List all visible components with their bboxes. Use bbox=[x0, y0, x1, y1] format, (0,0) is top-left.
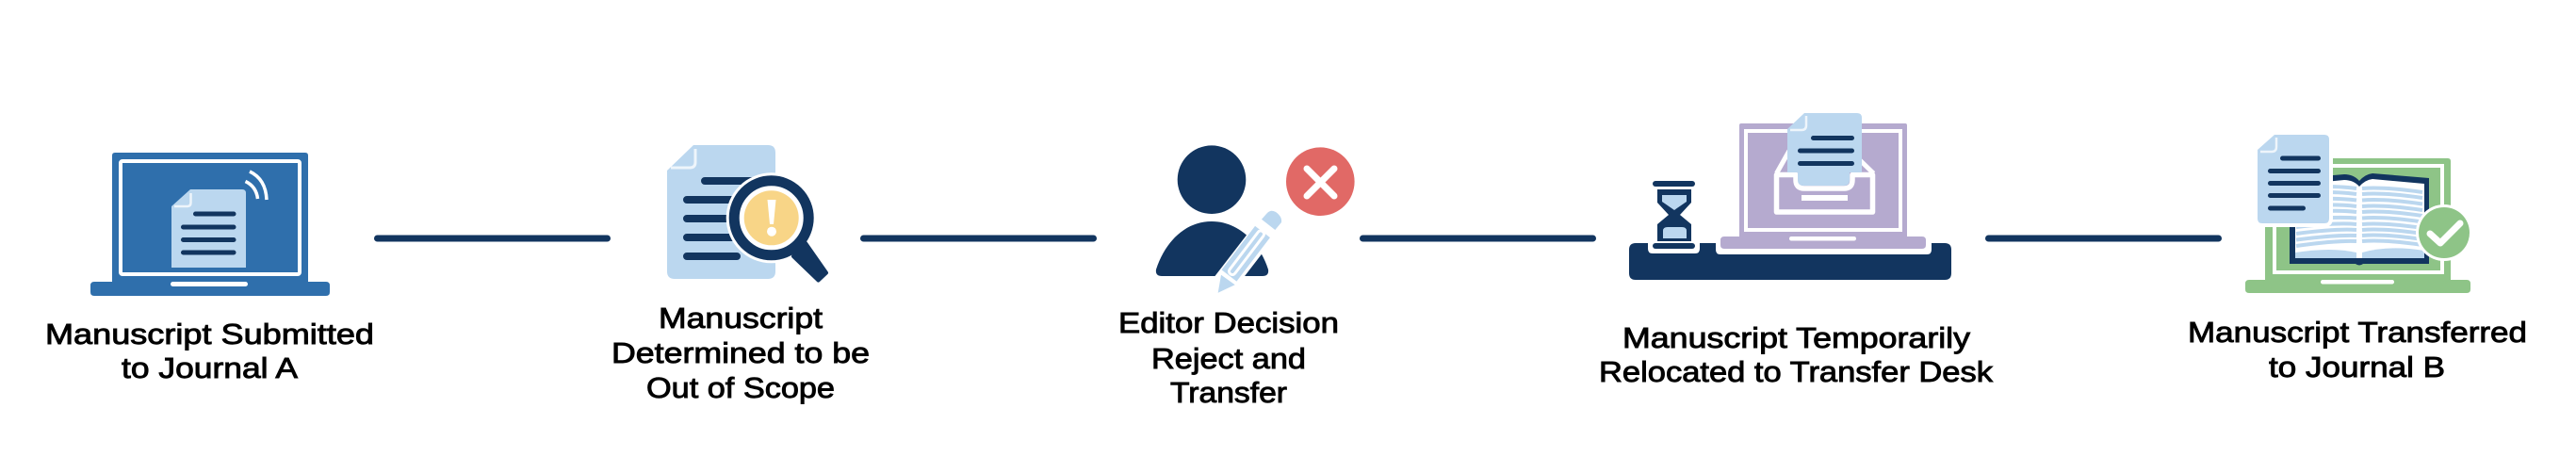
label: manuscript determined to be out of scope: Manuscript bbox=[659, 302, 823, 334]
step 2: out of scope bbox=[611, 145, 870, 404]
icon: document with magnifier and warning bbox=[667, 145, 826, 281]
icon: red rejection circle bbox=[1286, 147, 1355, 216]
label: manuscript transferred to journal B bbox=[2188, 316, 2527, 383]
label: manuscript determined to be out of scope: Out of Scope bbox=[646, 371, 835, 404]
label: manuscript submitted to journal A: Manuscript Submitted bbox=[45, 318, 374, 351]
label: manuscript submitted to journal A: to Journal A bbox=[122, 351, 298, 384]
label: manuscript submitted to journal A bbox=[45, 318, 374, 384]
label: manuscript temporarily relocated to transfer desk: Manuscript Temporarily bbox=[1622, 321, 1971, 354]
connector 3 bbox=[1362, 236, 1592, 241]
icon: laptop with document and signal bbox=[90, 153, 330, 296]
icon: editor with pencil bbox=[1156, 145, 1281, 293]
connector 2 bbox=[863, 236, 1093, 241]
icon: green check badge bbox=[2416, 204, 2472, 261]
step 5: transferred to journal B bbox=[2188, 135, 2527, 383]
icon: hourglass bbox=[1653, 181, 1695, 249]
label: editor decision reject and transfer: Reject and bbox=[1151, 342, 1306, 375]
label: manuscript transferred to journal B: Manuscript Transferred bbox=[2188, 316, 2527, 349]
icon: document bbox=[2258, 135, 2329, 223]
label: editor decision reject and transfer: Transfer bbox=[1170, 376, 1287, 409]
label: manuscript determined to be out of scope: Determined to be bbox=[611, 336, 870, 369]
icon: open book bbox=[2290, 173, 2429, 266]
icon: laptop with inbox tray and document bbox=[1720, 113, 1926, 249]
label: manuscript temporarily relocated to transfer desk bbox=[1599, 321, 1994, 388]
step 1: manuscript submitted bbox=[45, 153, 374, 384]
label: manuscript temporarily relocated to transfer desk: Relocated to Transfer Desk bbox=[1599, 355, 1994, 388]
connector 4 bbox=[1988, 236, 2218, 241]
label: manuscript determined to be out of scope bbox=[611, 302, 870, 404]
icon: transfer desk base bbox=[1629, 243, 1951, 280]
label: editor decision reject and transfer bbox=[1118, 306, 1339, 409]
label: manuscript transferred to journal B: to Journal B bbox=[2269, 351, 2445, 383]
icon: green laptop bbox=[2245, 158, 2470, 293]
step 4: transfer desk bbox=[1599, 113, 1994, 388]
connector 1 bbox=[377, 236, 607, 241]
step 3: editor decision bbox=[1118, 145, 1355, 409]
label: editor decision reject and transfer: Editor Decision bbox=[1118, 306, 1339, 339]
